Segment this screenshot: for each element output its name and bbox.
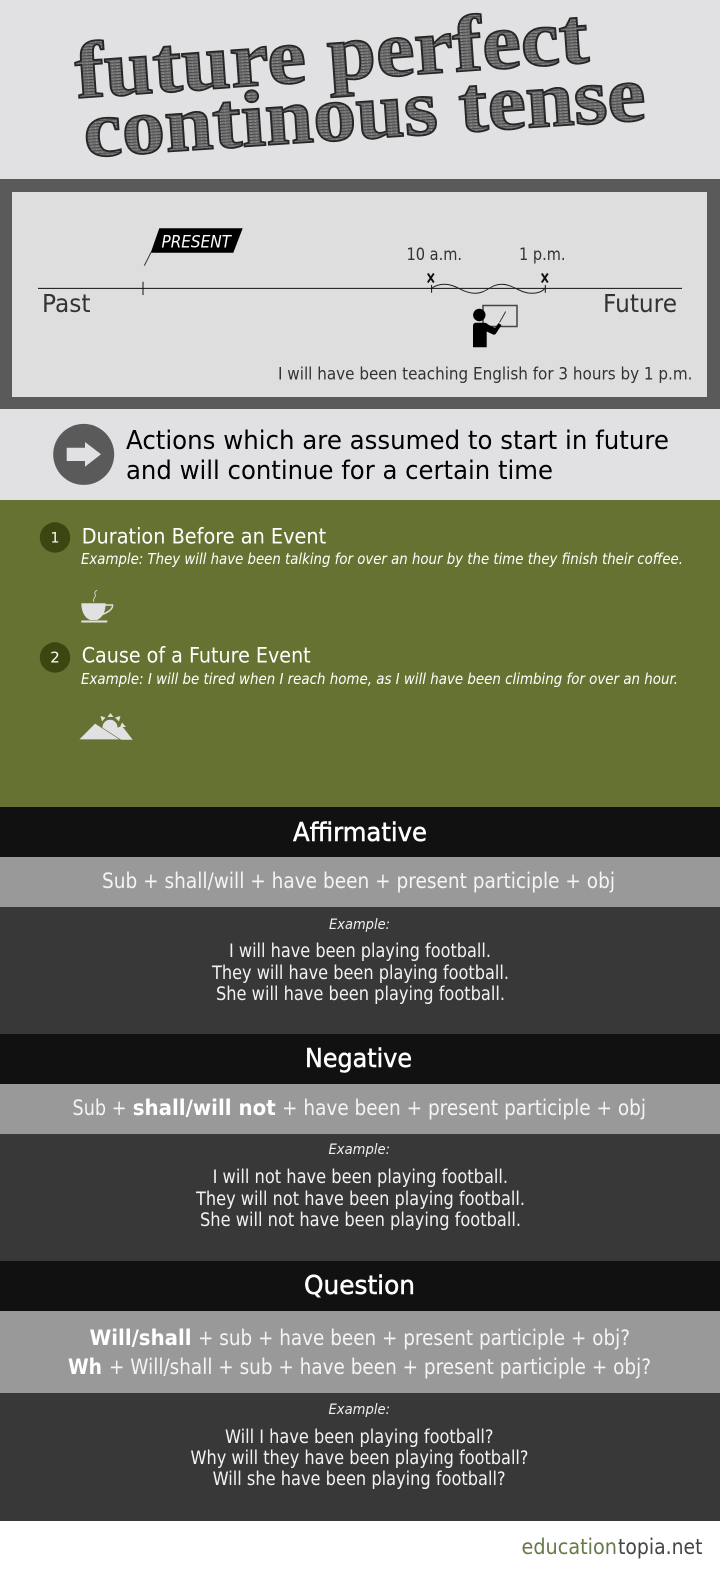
example sentences: I will have been playing football. bbox=[229, 941, 491, 962]
definition text: and will continue for a certain time bbox=[126, 456, 553, 486]
heading: cause of a future event: Cause of a Future Event bbox=[82, 644, 311, 669]
example sentences: She will not have been playing football. bbox=[200, 1210, 521, 1231]
title: continous tense bbox=[80, 50, 648, 175]
badge: 2 bbox=[40, 642, 70, 673]
example sentences bbox=[211, 941, 509, 1005]
logo: educationtopia.net bbox=[522, 1535, 702, 1559]
icon: arrow circle bbox=[53, 424, 114, 485]
formula: negative: shall/will not bbox=[133, 1096, 276, 1121]
example sentences: I will not have been playing football. bbox=[213, 1167, 508, 1188]
icon: teacher bbox=[473, 306, 517, 347]
section: affirmative bbox=[0, 807, 720, 1034]
flag: present: PRESENT bbox=[162, 233, 232, 253]
formula: question 1: + sub + have been + present participle + obj? bbox=[198, 1326, 630, 1351]
logo: educationtopia.net: education bbox=[522, 1535, 617, 1559]
formula: negative: Sub + bbox=[72, 1096, 126, 1121]
badge: 1 bbox=[40, 522, 70, 553]
definition text: Actions which are assumed to start in future bbox=[126, 426, 669, 456]
formula: negative bbox=[72, 1096, 646, 1121]
wavy duration line bbox=[432, 284, 545, 293]
marker: start x bbox=[428, 274, 434, 282]
badge: 2: 2 bbox=[50, 649, 60, 667]
label: 10 a.m.: 10 a.m. bbox=[406, 245, 462, 265]
formula: negative: + have been + present participle + obj bbox=[282, 1096, 646, 1121]
badge: 1: 1 bbox=[51, 531, 59, 547]
icon: coffee cup bbox=[81, 590, 113, 622]
heading: duration before an event: Duration Before an Event bbox=[82, 524, 326, 549]
flag: present bbox=[144, 228, 243, 266]
section: negative bbox=[0, 1034, 720, 1261]
heading: negative: Negative bbox=[305, 1044, 412, 1074]
formula: question 1: Will/shall bbox=[90, 1326, 192, 1351]
formula: affirmative: Sub + shall/will + have been + present participle + obj bbox=[102, 869, 615, 894]
example label: Example: bbox=[328, 1402, 390, 1418]
example sentences bbox=[195, 1167, 525, 1231]
example label: Example: bbox=[328, 1142, 390, 1158]
label: past: Past bbox=[42, 289, 91, 318]
panel: definition bbox=[0, 409, 720, 500]
panel: uses bbox=[0, 500, 720, 807]
example sentences: They will not have been playing football. bbox=[195, 1189, 525, 1210]
example sentences: Why will they have been playing football? bbox=[190, 1448, 528, 1469]
label: 1 p.m.: 1 p.m. bbox=[519, 245, 566, 265]
icon: mountain and sun bbox=[79, 713, 133, 740]
panel: timeline bbox=[0, 179, 720, 409]
example sentences bbox=[190, 1427, 528, 1490]
example sentences: Will I have been playing football? bbox=[225, 1427, 494, 1448]
example sentences: Will she have been playing football? bbox=[213, 1469, 506, 1490]
heading: affirmative: Affirmative bbox=[293, 818, 427, 848]
formula: question 2: Wh bbox=[68, 1355, 102, 1380]
definition text bbox=[126, 426, 669, 486]
example sentences: She will have been playing football. bbox=[216, 984, 505, 1005]
timeline axis bbox=[38, 282, 682, 295]
example label: Example: bbox=[329, 917, 390, 933]
label: future: Future bbox=[603, 289, 677, 318]
marker: end x bbox=[542, 274, 548, 282]
heading: question: Question bbox=[304, 1271, 415, 1301]
example sentences: They will have been playing football. bbox=[211, 963, 509, 984]
panel: header bbox=[0, 0, 720, 179]
logo: educationtopia.net: topia.net bbox=[618, 1535, 702, 1559]
title bbox=[72, 0, 648, 175]
section: question bbox=[0, 1261, 720, 1521]
